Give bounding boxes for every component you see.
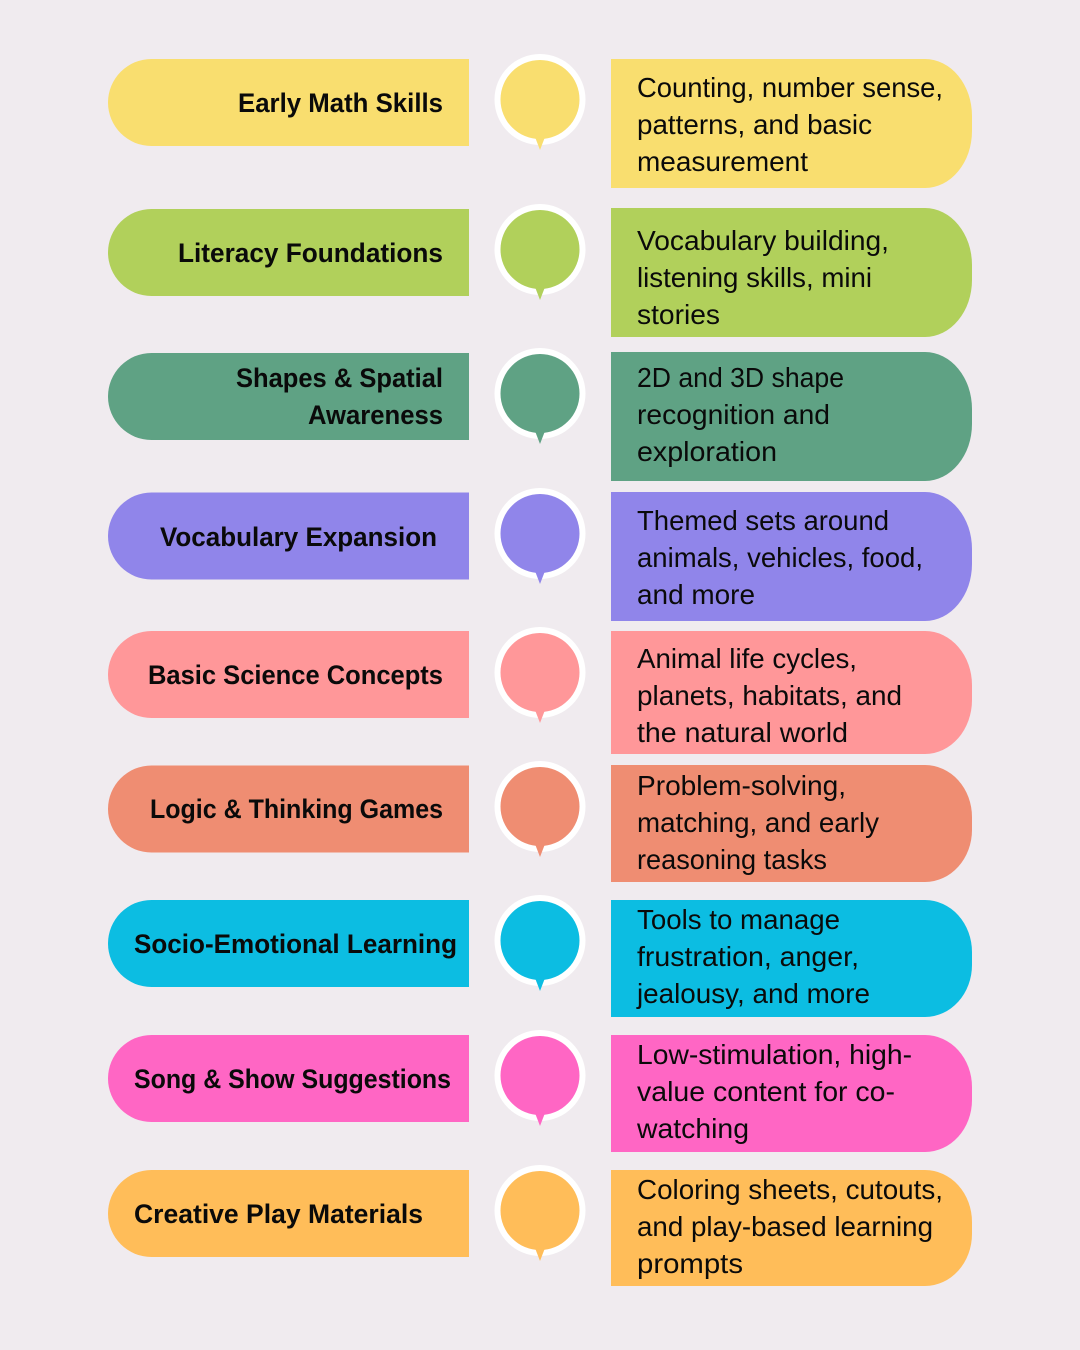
description panel: Song & Show Suggestions: watching	[636, 1113, 749, 1144]
description panel: Shapes & Spatial Awareness: 2D and 3D shape	[637, 362, 844, 393]
row: Creative Play Materials	[108, 1165, 972, 1286]
description panel: Literacy Foundations: Vocabulary building,	[637, 225, 889, 256]
description panel: Shapes & Spatial Awareness: recognition and	[637, 399, 830, 430]
description panel: Shapes & Spatial Awareness	[611, 352, 972, 481]
row: Basic Science Concepts	[108, 627, 972, 754]
row: Early Math Skills	[108, 54, 972, 188]
label panel: Vocabulary Expansion	[108, 492, 469, 580]
description panel: Early Math Skills: patterns, and basic	[637, 109, 872, 140]
icon: blue speech bubble	[494, 895, 586, 991]
icon: teal speech bubble	[494, 348, 586, 444]
label panel: Creative Play Materials: Creative Play Materials	[134, 1199, 423, 1229]
description panel: Literacy Foundations: stories	[637, 299, 720, 330]
description panel: Creative Play Materials	[611, 1170, 972, 1286]
icon: magenta speech bubble	[494, 1030, 586, 1126]
description panel: Basic Science Concepts: the natural world	[637, 717, 848, 748]
description panel: Literacy Foundations: listening skills, mini	[637, 262, 872, 293]
description panel: Vocabulary Expansion: animals, vehicles, food,	[637, 542, 923, 573]
label panel: Early Math Skills: Early Math Skills	[238, 88, 443, 118]
description panel: Logic & Thinking Games: reasoning tasks	[637, 844, 827, 875]
description panel: Creative Play Materials: and play-based learning	[637, 1211, 933, 1242]
row: Logic & Thinking Games	[108, 761, 972, 882]
description panel: Song & Show Suggestions: value content for co-	[637, 1076, 895, 1107]
label panel: Early Math Skills	[108, 59, 469, 146]
label panel: Shapes & Spatial Awareness	[108, 353, 469, 440]
icon: pink speech bubble	[494, 627, 586, 723]
icon: salmon speech bubble	[494, 761, 586, 857]
description panel: Basic Science Concepts: planets, habitats, and	[637, 680, 902, 711]
label panel: Basic Science Concepts	[108, 631, 469, 718]
label panel: Shapes & Spatial Awareness: Shapes & Spatial	[236, 363, 443, 393]
row: Song & Show Suggestions	[108, 1030, 972, 1152]
description panel: Creative Play Materials: Coloring sheets, cutouts,	[637, 1174, 943, 1205]
label panel: Shapes & Spatial Awareness: Awareness	[308, 400, 443, 430]
label panel: Song & Show Suggestions	[108, 1035, 469, 1122]
label panel: Socio-Emotional Learning: Socio-Emotional Learning	[134, 929, 457, 959]
description panel: Song & Show Suggestions	[611, 1035, 972, 1152]
description panel: Early Math Skills: measurement	[637, 146, 808, 177]
row: Vocabulary Expansion	[108, 488, 972, 621]
description panel: Literacy Foundations	[611, 208, 972, 337]
row: Literacy Foundations	[108, 204, 972, 337]
label panel: Creative Play Materials	[108, 1170, 469, 1257]
description panel: Socio-Emotional Learning	[611, 900, 972, 1017]
description panel: Logic & Thinking Games: Problem-solving,	[637, 770, 846, 801]
label panel: Socio-Emotional Learning	[108, 900, 469, 987]
label panel: Literacy Foundations: Literacy Foundations	[178, 238, 443, 268]
label panel: Vocabulary Expansion: Vocabulary Expansion	[160, 522, 437, 552]
description panel: Socio-Emotional Learning: Tools to manage	[637, 904, 840, 935]
label panel: Logic & Thinking Games	[108, 766, 469, 852]
label panel: Basic Science Concepts: Basic Science Concepts	[148, 660, 443, 690]
description panel: Early Math Skills: Counting, number sense,	[637, 72, 943, 103]
label panel: Logic & Thinking Games: Logic & Thinking Games	[150, 794, 443, 824]
icon: orange speech bubble	[494, 1165, 586, 1261]
description panel: Basic Science Concepts: Animal life cycles,	[637, 643, 857, 674]
description panel: Socio-Emotional Learning: jealousy, and more	[636, 978, 870, 1009]
description panel: Song & Show Suggestions: Low-stimulation, high-	[637, 1039, 912, 1070]
row: Shapes & Spatial Awareness	[108, 348, 972, 481]
description panel: Vocabulary Expansion: Themed sets around	[637, 505, 889, 536]
description panel: Basic Science Concepts	[611, 631, 972, 754]
description panel: Shapes & Spatial Awareness: exploration	[637, 436, 777, 467]
description panel: Vocabulary Expansion	[611, 492, 972, 621]
icon: purple speech bubble	[494, 488, 586, 584]
description panel: Creative Play Materials: prompts	[637, 1248, 743, 1279]
label panel: Song & Show Suggestions: Song & Show Suggestions	[134, 1064, 451, 1094]
description panel: Socio-Emotional Learning: frustration, anger,	[637, 941, 859, 972]
icon: green speech bubble	[494, 204, 586, 300]
label panel: Literacy Foundations	[108, 209, 469, 296]
description panel: Vocabulary Expansion: and more	[637, 579, 755, 610]
description panel: Logic & Thinking Games	[611, 765, 972, 882]
description panel: Early Math Skills	[611, 59, 972, 188]
icon: yellow speech bubble	[494, 54, 586, 150]
description panel: Logic & Thinking Games: matching, and early	[637, 807, 879, 838]
row: Socio-Emotional Learning	[108, 895, 972, 1017]
